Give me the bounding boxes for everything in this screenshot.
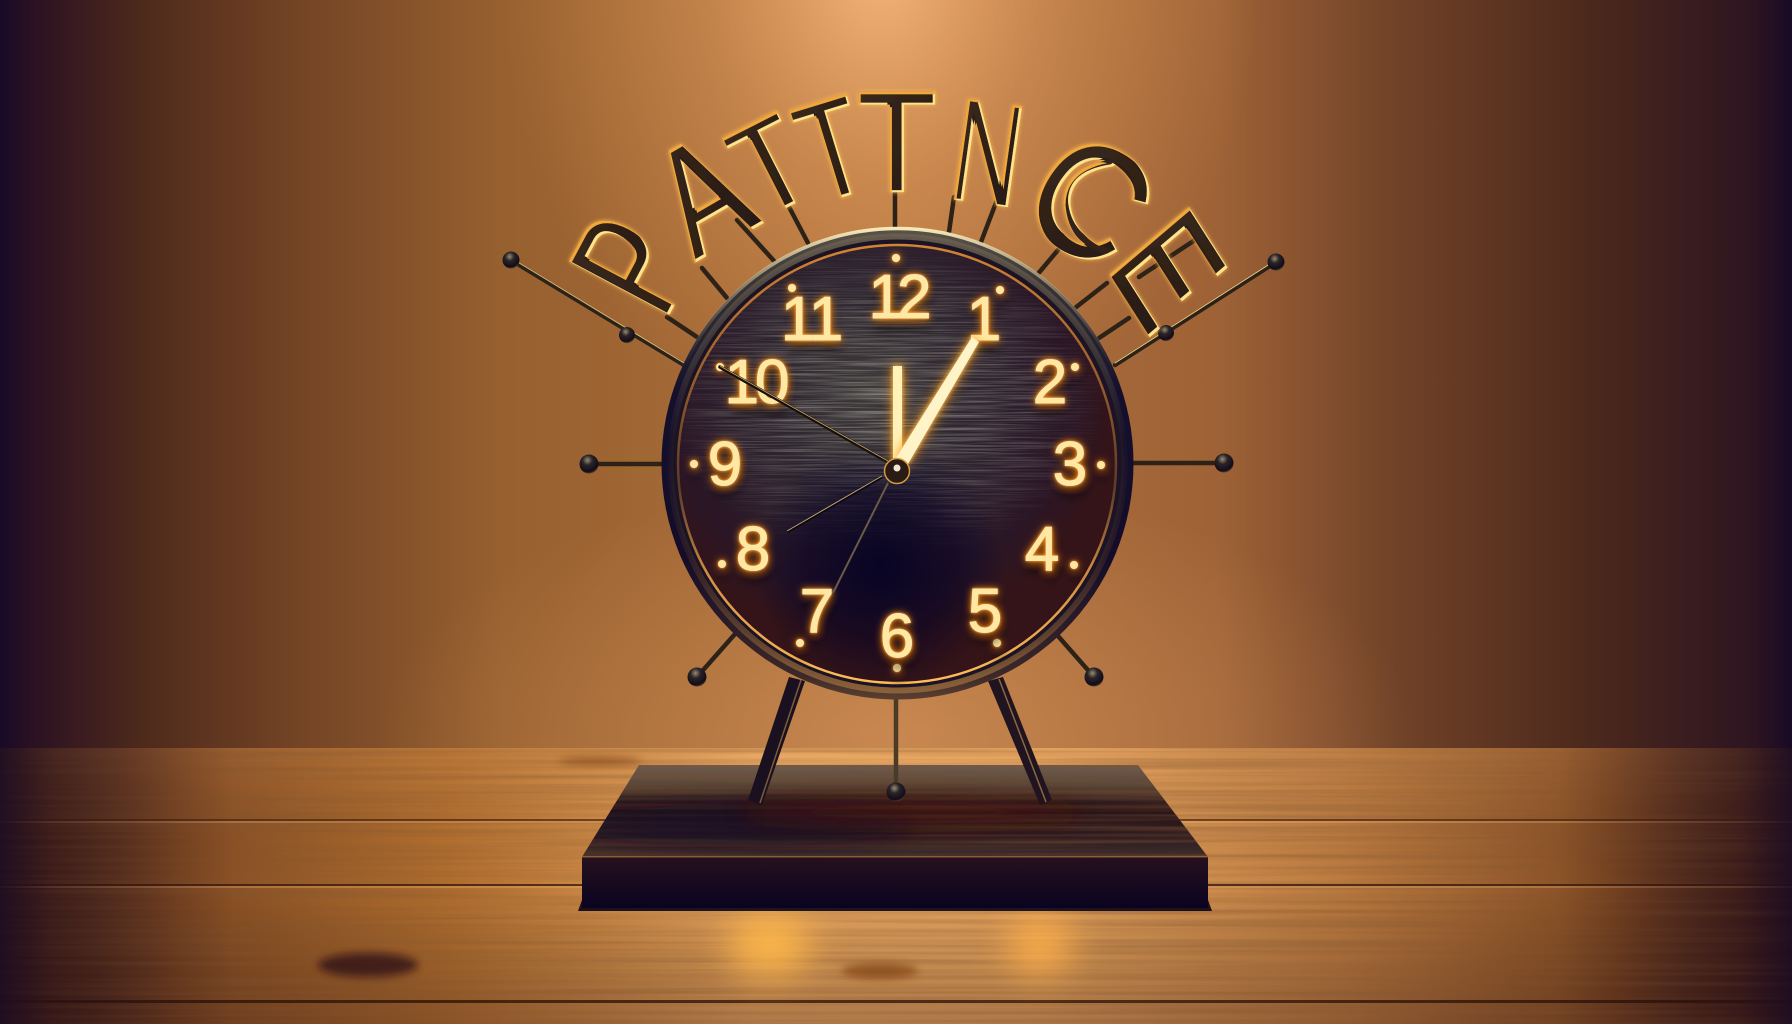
- knot: left table knot: [318, 953, 418, 977]
- knot: top plank mark: [558, 757, 642, 765]
- hand: thin hand toward 7: [833, 483, 888, 593]
- letter T: T: [779, 66, 885, 234]
- clock rim: [662, 228, 1134, 700]
- numeral 6: 6: [880, 602, 914, 671]
- hand: thin hand toward 10: [720, 366, 888, 462]
- neon ring: [678, 245, 1116, 683]
- numeral 8: 8: [736, 515, 770, 584]
- clock numerals: [708, 263, 1087, 671]
- numeral 4: 4: [1025, 515, 1059, 584]
- rod: left horizontal spoke: [589, 462, 664, 466]
- rod: bottom centre spoke: [894, 695, 898, 790]
- letter P: P: [535, 190, 728, 337]
- numeral 12: 12: [869, 263, 929, 332]
- letter T: T: [709, 86, 832, 245]
- numeral 2: 2: [1033, 348, 1067, 417]
- rod: lower left spoke: [697, 634, 735, 677]
- panel: wooden table surface: [0, 748, 1792, 1024]
- numeral 1: 1: [967, 285, 1001, 354]
- clock face: [678, 240, 1120, 690]
- numeral 10: 10: [725, 348, 788, 417]
- numeral 3: 3: [1053, 430, 1087, 499]
- letter C: C: [994, 95, 1186, 306]
- wooden base: [570, 765, 1212, 911]
- hour markers: [690, 254, 1105, 672]
- hand: minute hand: [896, 337, 979, 464]
- letter T: T: [857, 62, 937, 222]
- reflection: left glow on table: [728, 915, 812, 975]
- rod: right horizontal spoke: [1132, 461, 1224, 465]
- reflection: right glow on table: [1006, 917, 1074, 973]
- panel: wall background: [0, 0, 1792, 760]
- letter C inner arc: [1067, 163, 1112, 252]
- letter E: E: [1081, 178, 1255, 361]
- metal rods behind clock and letters: [511, 192, 1276, 790]
- clock leg: left: [748, 677, 805, 805]
- letter N: N: [943, 68, 1033, 238]
- numeral 5: 5: [968, 577, 1002, 646]
- letter A: A: [625, 100, 780, 291]
- numeral 7: 7: [800, 577, 834, 646]
- neon title letters PATTNCE: [535, 62, 1255, 361]
- hand: hour hand: [893, 366, 902, 460]
- rod: lower right spoke: [1058, 636, 1094, 677]
- clock: [662, 228, 1134, 700]
- numeral 9: 9: [708, 430, 742, 499]
- hand: thin hand toward 8: [787, 476, 882, 532]
- clock hub: [884, 458, 910, 484]
- knot: centre table knot: [842, 963, 918, 979]
- rods: letter supports: [667, 192, 1198, 338]
- numeral 11: 11: [781, 285, 841, 354]
- rod: right long spoke with balls: [1115, 260, 1276, 365]
- clock leg: right: [988, 677, 1052, 805]
- rod: left long spoke with balls: [511, 258, 684, 365]
- rod end balls: [502, 252, 1284, 802]
